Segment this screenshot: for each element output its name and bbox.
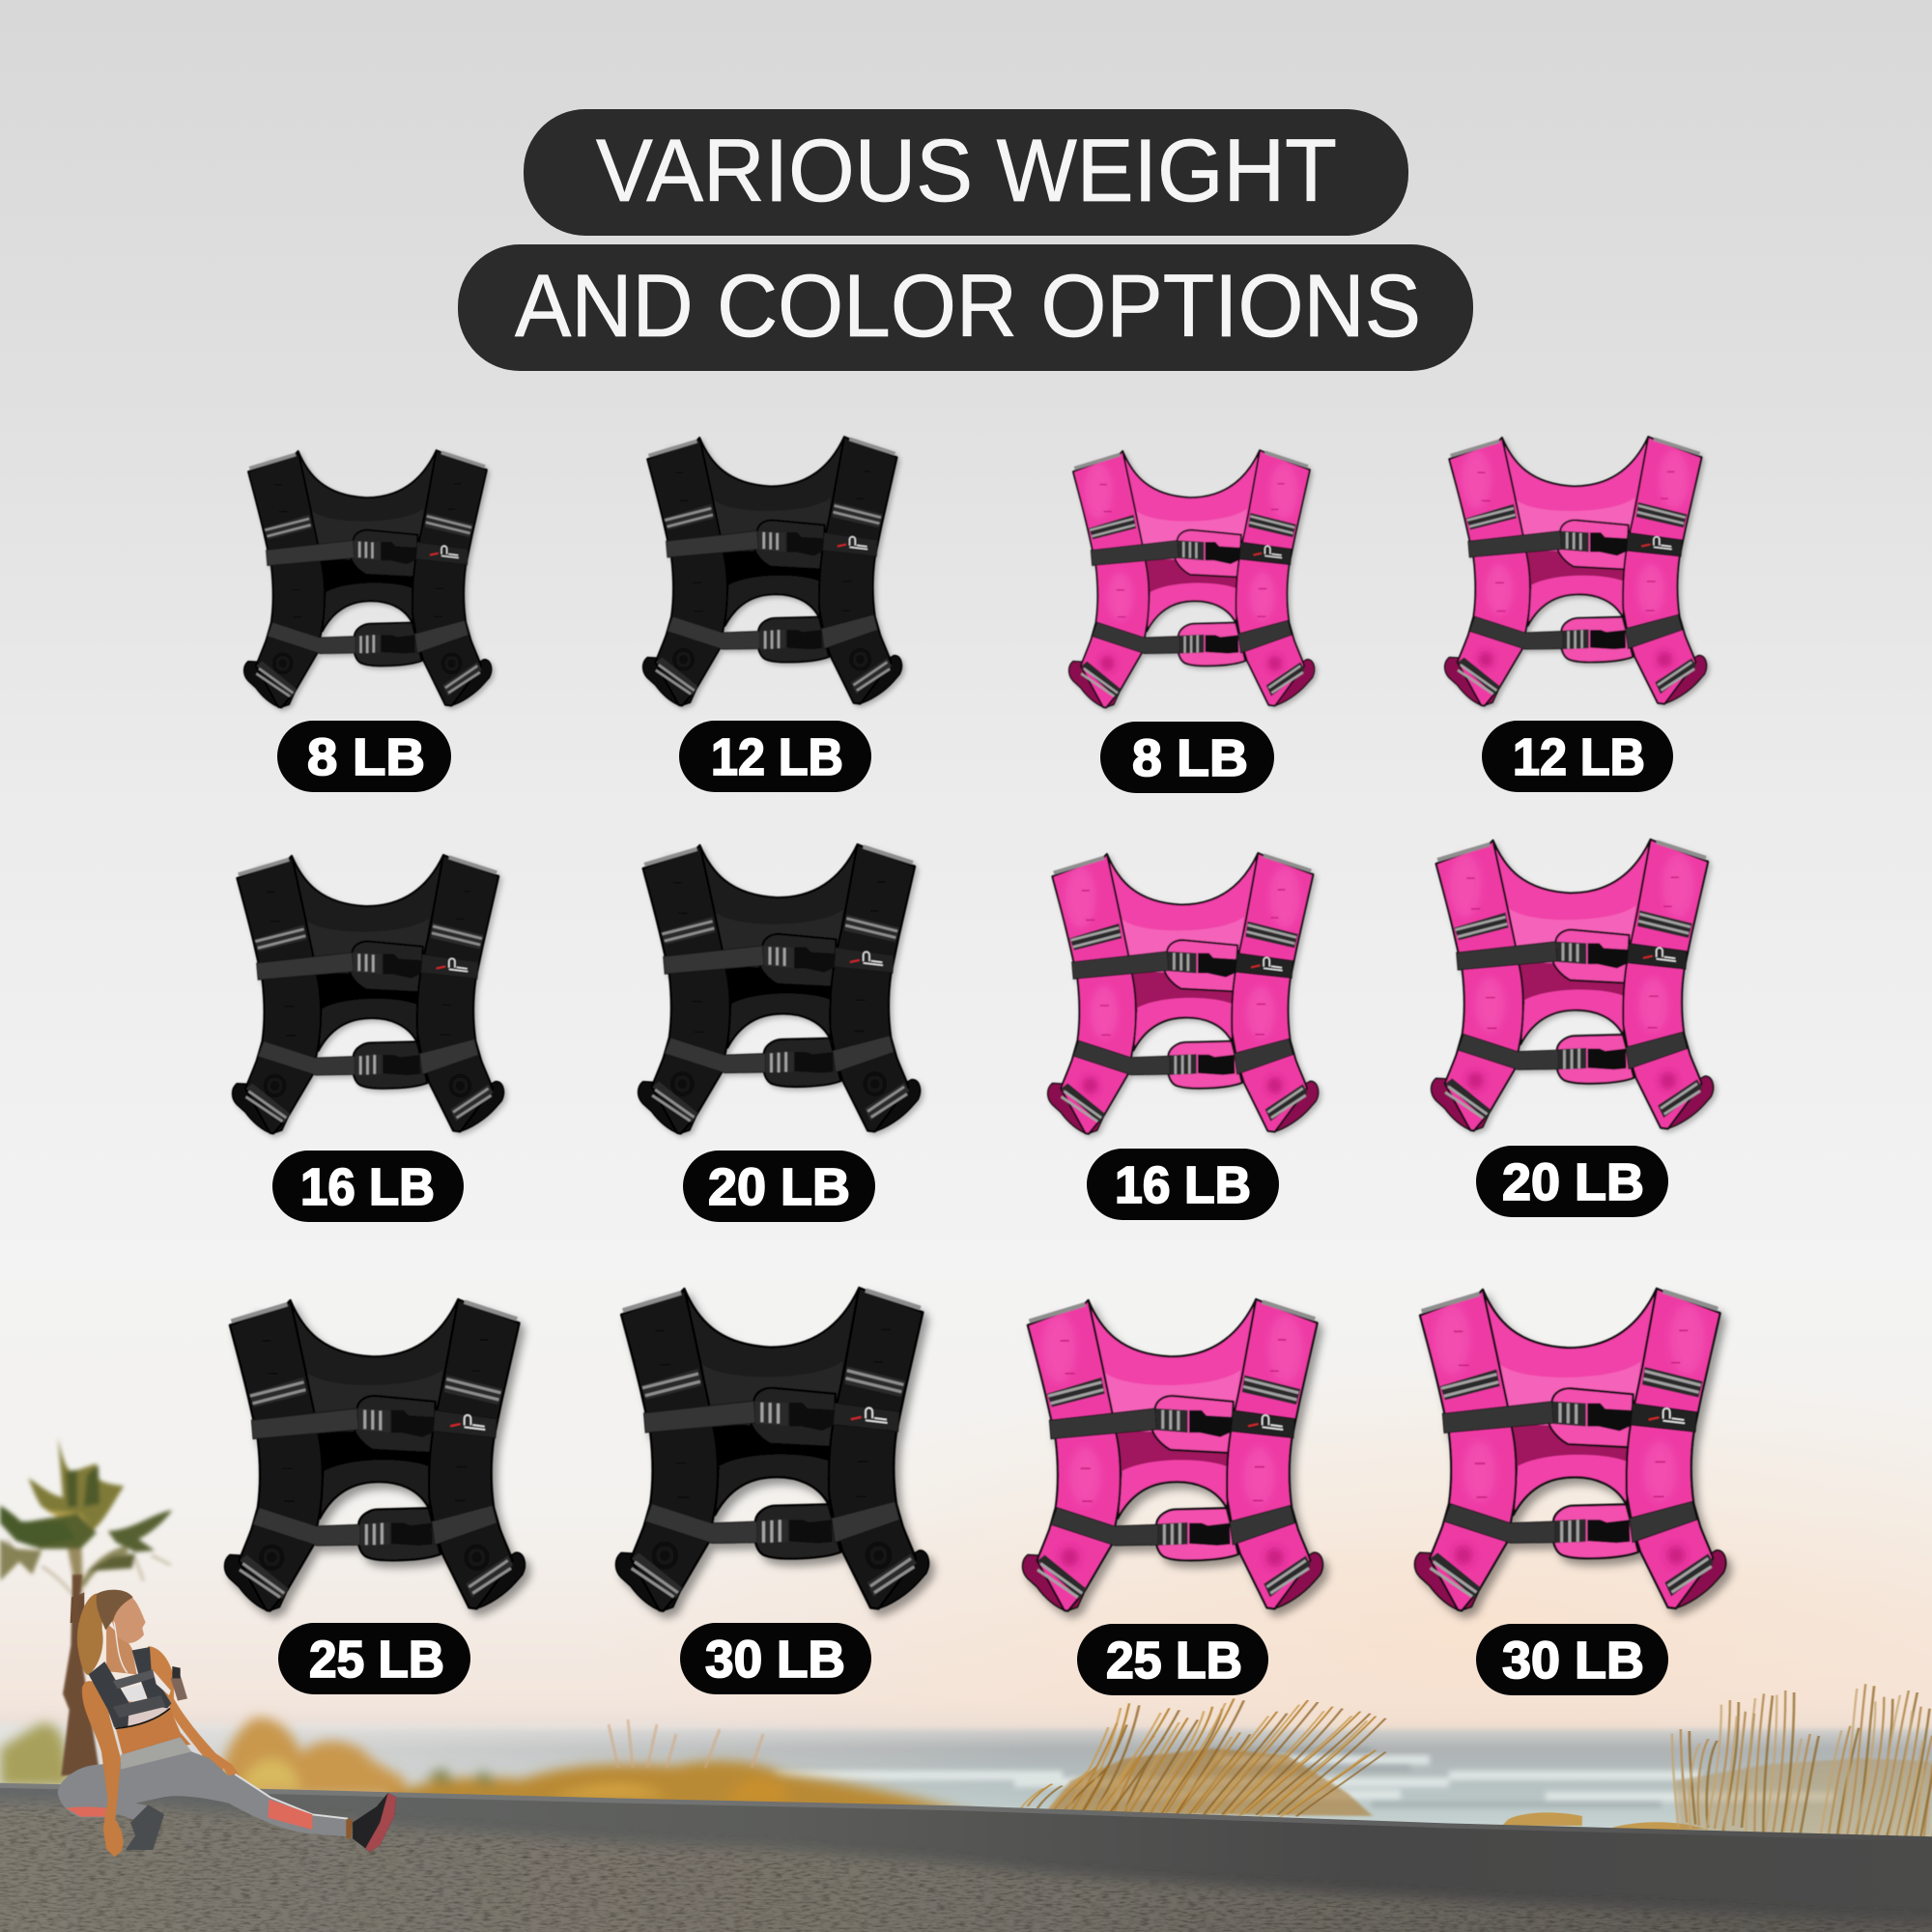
vest grid	[225, 437, 1726, 1695]
weight label: 25 LB black: 25 LB	[309, 1631, 444, 1689]
legging accent	[66, 1800, 312, 1830]
grass tuft right of centre	[1019, 1698, 1705, 1833]
weight label: 12 LB pink: 12 LB	[1513, 728, 1645, 786]
vest: black 25 lb	[225, 1299, 525, 1611]
palm trunk behind woman	[61, 1575, 99, 1776]
waistband	[121, 1737, 191, 1770]
weight label: 25 LB black	[278, 1623, 470, 1694]
weight label: 16 LB black: 16 LB	[300, 1158, 435, 1216]
worn vest	[89, 1647, 171, 1728]
leggings	[58, 1737, 351, 1837]
ankle	[346, 1819, 353, 1838]
torso	[108, 1697, 190, 1754]
title line 2: AND COLOR OPTIONS	[515, 257, 1421, 355]
front shoe sole	[365, 1793, 396, 1852]
weight label: 20 LB black	[683, 1151, 875, 1222]
rear shoe	[126, 1804, 164, 1850]
weight label: 20 LB black: 20 LB	[708, 1158, 850, 1216]
weight label: 8 LB black	[277, 721, 451, 792]
vest: pink 30 lb	[1414, 1289, 1726, 1610]
weight label: 12 LB black: 12 LB	[711, 728, 843, 786]
phone holder	[172, 1666, 181, 1678]
vest: black 16 lb	[233, 855, 503, 1134]
title line 1	[524, 109, 1408, 236]
road curb	[0, 1783, 1932, 1932]
vest: pink 8 lb	[1069, 450, 1315, 707]
weight label: 16 LB pink: 16 LB	[1115, 1156, 1251, 1214]
woman stretching wearing vest	[58, 1575, 396, 1857]
legging stripe	[235, 1775, 348, 1819]
title	[458, 109, 1473, 371]
vest: black 30 lb	[616, 1288, 928, 1611]
raised arm	[148, 1646, 240, 1776]
gravel ground	[0, 1801, 1932, 1932]
front shoe	[353, 1793, 396, 1852]
vest: black 8 lb	[244, 450, 492, 707]
front arm	[82, 1681, 124, 1857]
face	[110, 1597, 146, 1643]
weight label: 8 LB pink: 8 LB	[1132, 729, 1248, 787]
title line 1: VARIOUS WEIGHT	[596, 122, 1337, 220]
vest: pink 12 lb	[1445, 437, 1707, 706]
weight label: 30 LB black	[680, 1623, 871, 1694]
weight label: 20 LB pink: 20 LB	[1502, 1153, 1644, 1211]
beach landscape scene	[0, 1684, 1932, 1932]
weight label: 8 LB black: 8 LB	[307, 728, 425, 786]
weight label: 30 LB pink	[1476, 1624, 1668, 1695]
weight label: 20 LB pink	[1476, 1146, 1668, 1217]
weight label: 30 LB pink: 30 LB	[1502, 1632, 1644, 1690]
hair cap	[97, 1590, 133, 1630]
weight label: 16 LB pink	[1087, 1149, 1279, 1220]
earbud cable	[114, 1622, 128, 1673]
weight label: 12 LB black	[679, 721, 871, 792]
vest: black 20 lb	[639, 844, 921, 1134]
palm tree	[0, 1437, 172, 1623]
vest: black 12 lb	[643, 437, 902, 706]
weight label: 16 LB black	[272, 1151, 464, 1222]
grass tuft far right	[1672, 1684, 1932, 1841]
armband	[171, 1675, 187, 1701]
weight label: 8 LB pink	[1100, 722, 1274, 793]
weight label: 25 LB pink: 25 LB	[1106, 1632, 1242, 1690]
weight label: 30 LB black: 30 LB	[705, 1631, 845, 1689]
orange shrubs left	[0, 1718, 976, 1816]
ponytail	[77, 1593, 103, 1675]
weight label: 12 LB pink	[1482, 721, 1673, 792]
neck	[106, 1623, 137, 1674]
vest: pink 25 lb	[1023, 1299, 1322, 1611]
vest: pink 20 lb	[1432, 839, 1714, 1131]
vest: pink 16 lb	[1048, 853, 1319, 1134]
weight label: 25 LB pink	[1077, 1624, 1268, 1695]
